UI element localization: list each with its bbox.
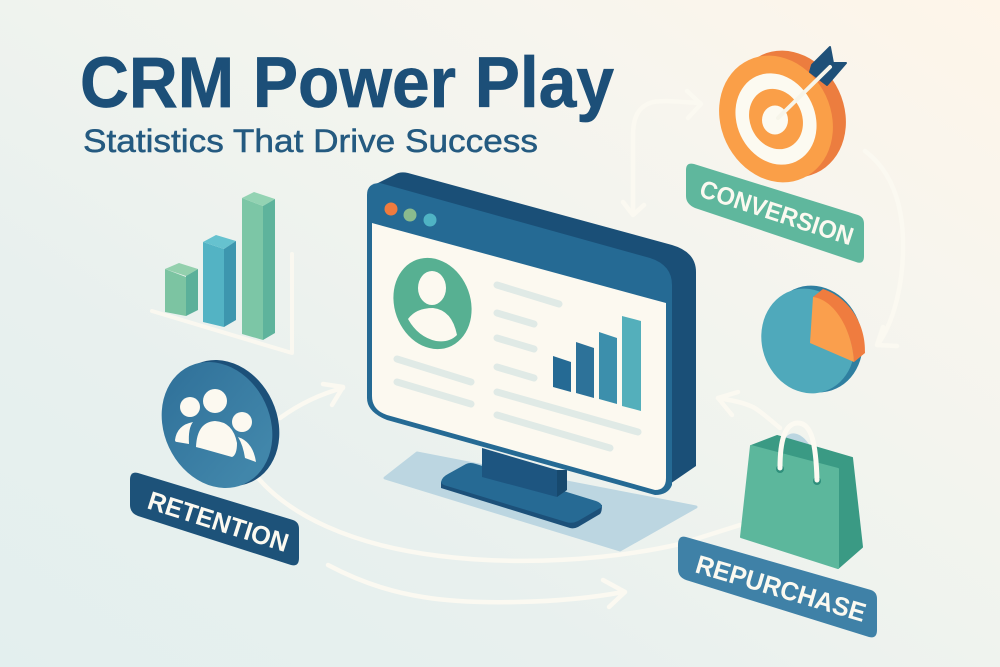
label: conversion: CONVERSION bbox=[696, 175, 857, 251]
window dots bbox=[384, 202, 436, 226]
subtitle: Statistics That Drive Success bbox=[83, 123, 538, 159]
label: retention: RETENTION bbox=[144, 485, 292, 558]
icon: users circle bbox=[141, 342, 300, 506]
icon: target bbox=[699, 32, 866, 201]
monitor stand bbox=[441, 448, 602, 528]
monitor screen bbox=[372, 223, 666, 490]
icon: bar chart bbox=[152, 192, 292, 353]
arrow: flow connectors bbox=[258, 91, 903, 607]
avatar bbox=[381, 247, 484, 360]
title: CRM Power Play bbox=[80, 44, 614, 123]
text lines bbox=[397, 285, 638, 448]
icon: pie chart bbox=[748, 273, 876, 406]
screen bar chart bbox=[553, 316, 641, 411]
icon: monitor bbox=[367, 172, 696, 528]
icon: monitor shadow bbox=[385, 453, 696, 550]
icon: shopping bag bbox=[741, 423, 862, 568]
label: repurchase: REPURCHASE bbox=[692, 549, 870, 628]
